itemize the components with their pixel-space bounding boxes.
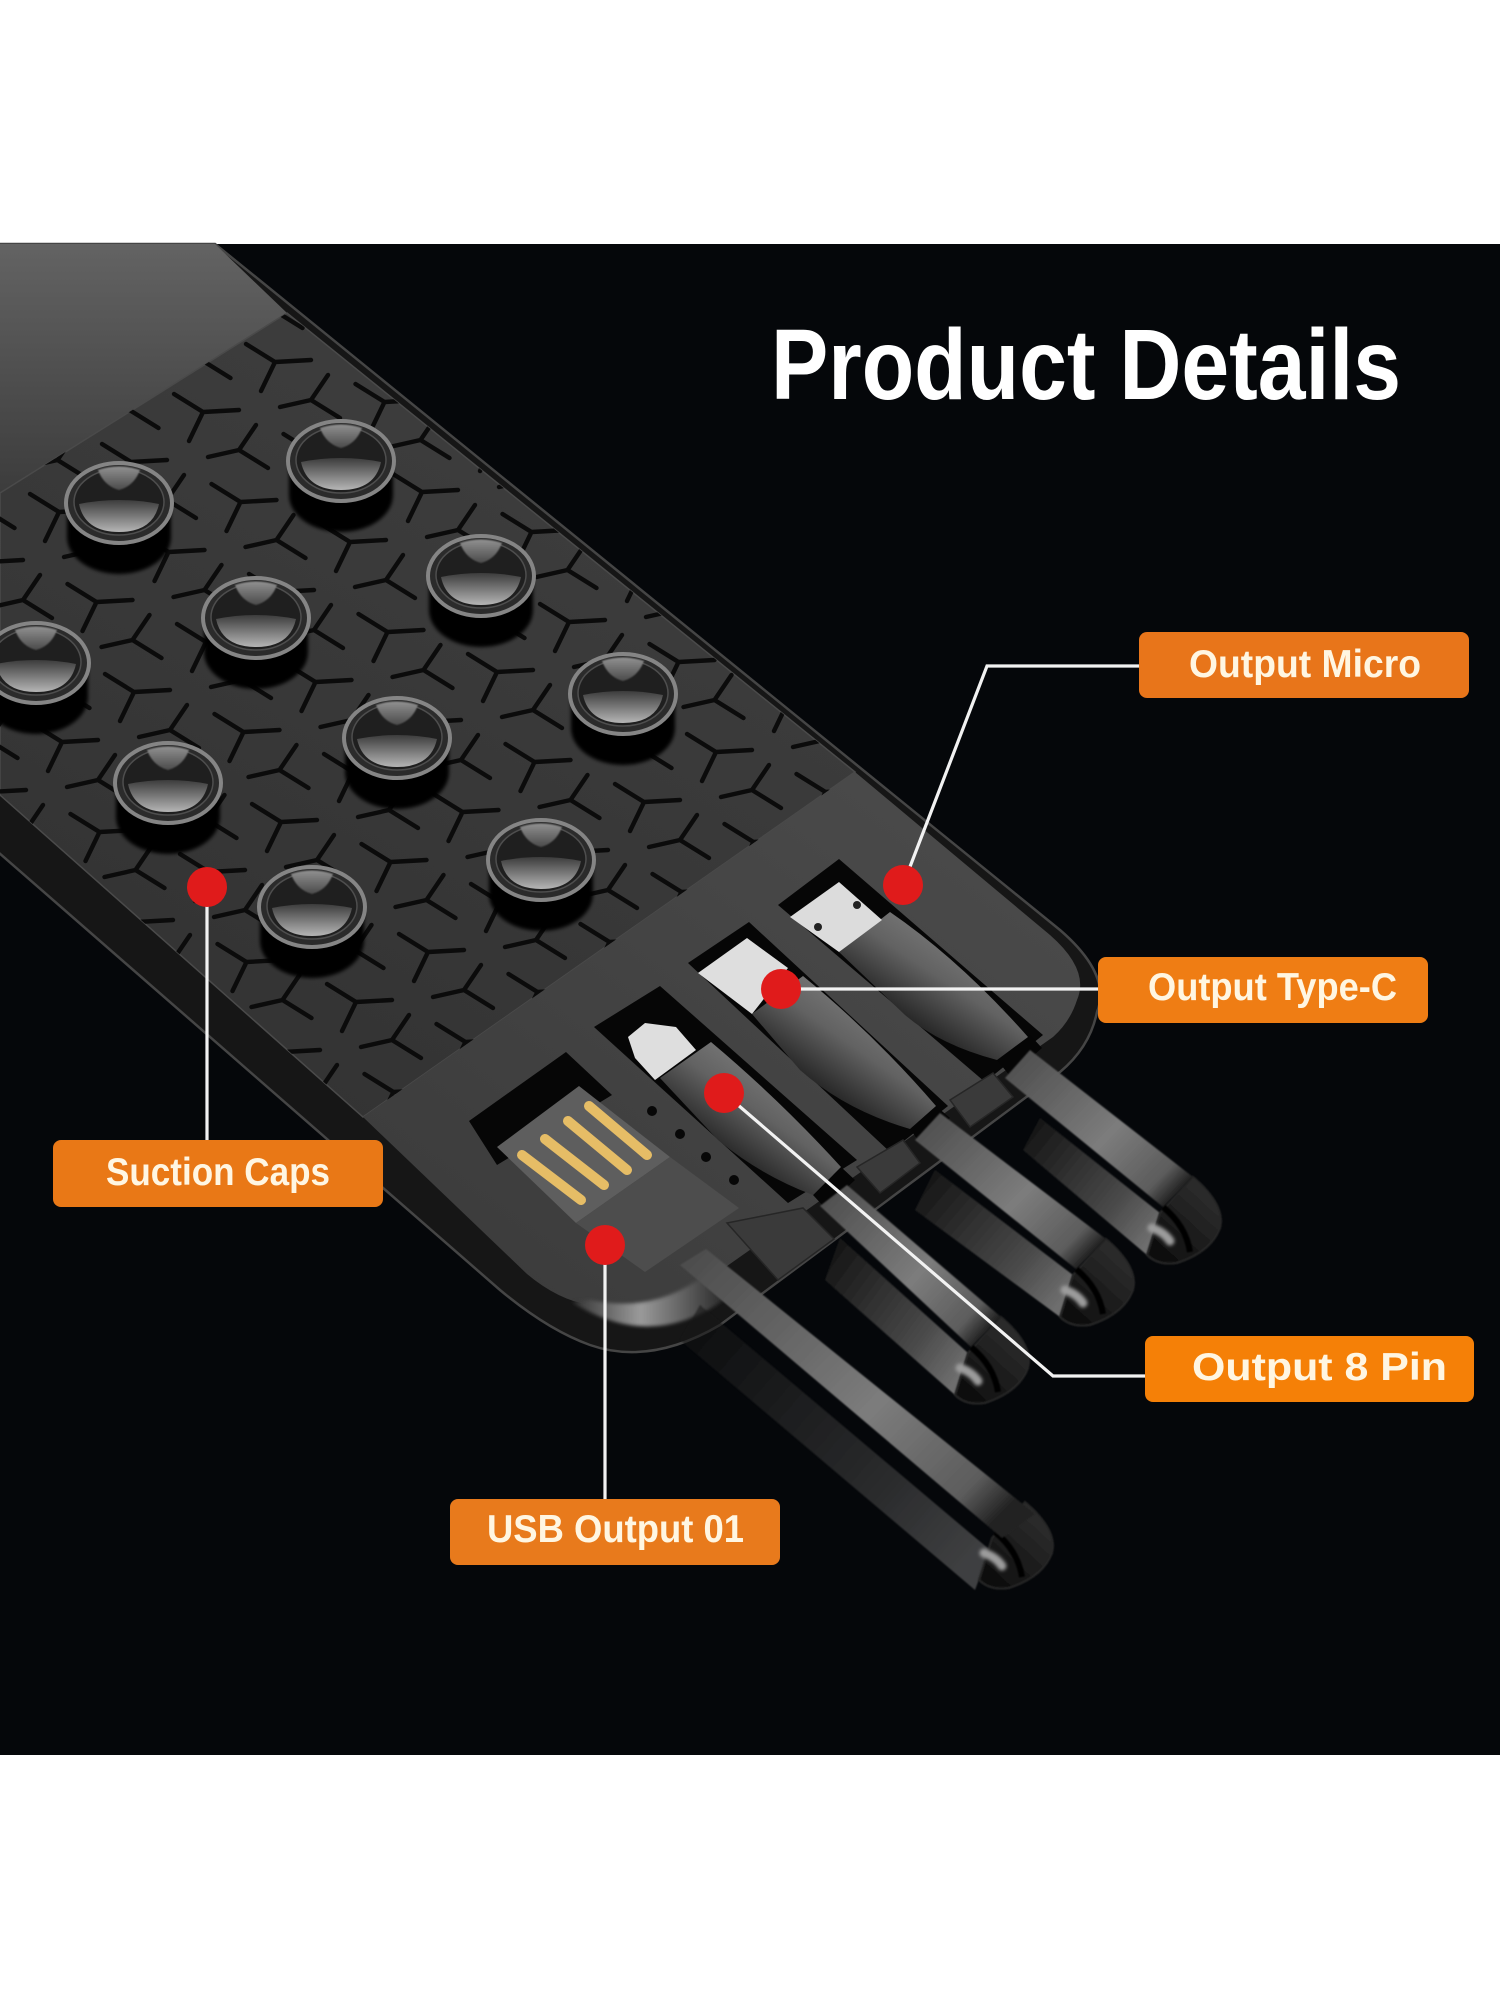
black panel [0,244,1500,1755]
Type-C cable [698,938,1134,1326]
callout: output 8 pin [704,1073,1474,1402]
Type-C slot [688,922,948,1152]
title: Product Details [771,309,1401,421]
suction caps [0,421,676,978]
USB connector tongue [497,1086,739,1272]
micro slot [778,859,1043,1082]
bright end ring [572,1274,724,1327]
callout: suction caps [53,867,383,1207]
callout: output micro [883,632,1469,905]
USB slot [469,1052,612,1165]
USB cable [680,1249,1053,1590]
connector end plate [363,772,1080,1308]
callout: output micro: Output Micro [1189,643,1421,686]
callout: output type-c: Output Type-C [1148,966,1397,1009]
gold pins [522,1106,647,1200]
device body [0,244,1100,1352]
callout: usb output 01: USB Output 01 [487,1508,744,1551]
slot dots [647,1106,739,1185]
callout: usb output 01 [450,1225,780,1565]
textured grip area [0,312,856,1118]
device top cover [0,244,287,493]
callout: output type-c [761,957,1428,1023]
8 pin slot [594,986,857,1203]
callout: output 8 pin: Output 8 Pin [1192,1346,1447,1389]
8 pin cable [628,1023,1029,1404]
micro cable [790,882,1221,1264]
cable straps [727,1073,1013,1280]
callout: suction caps: Suction Caps [106,1151,330,1194]
product illustration: power bank [0,0,1221,1590]
